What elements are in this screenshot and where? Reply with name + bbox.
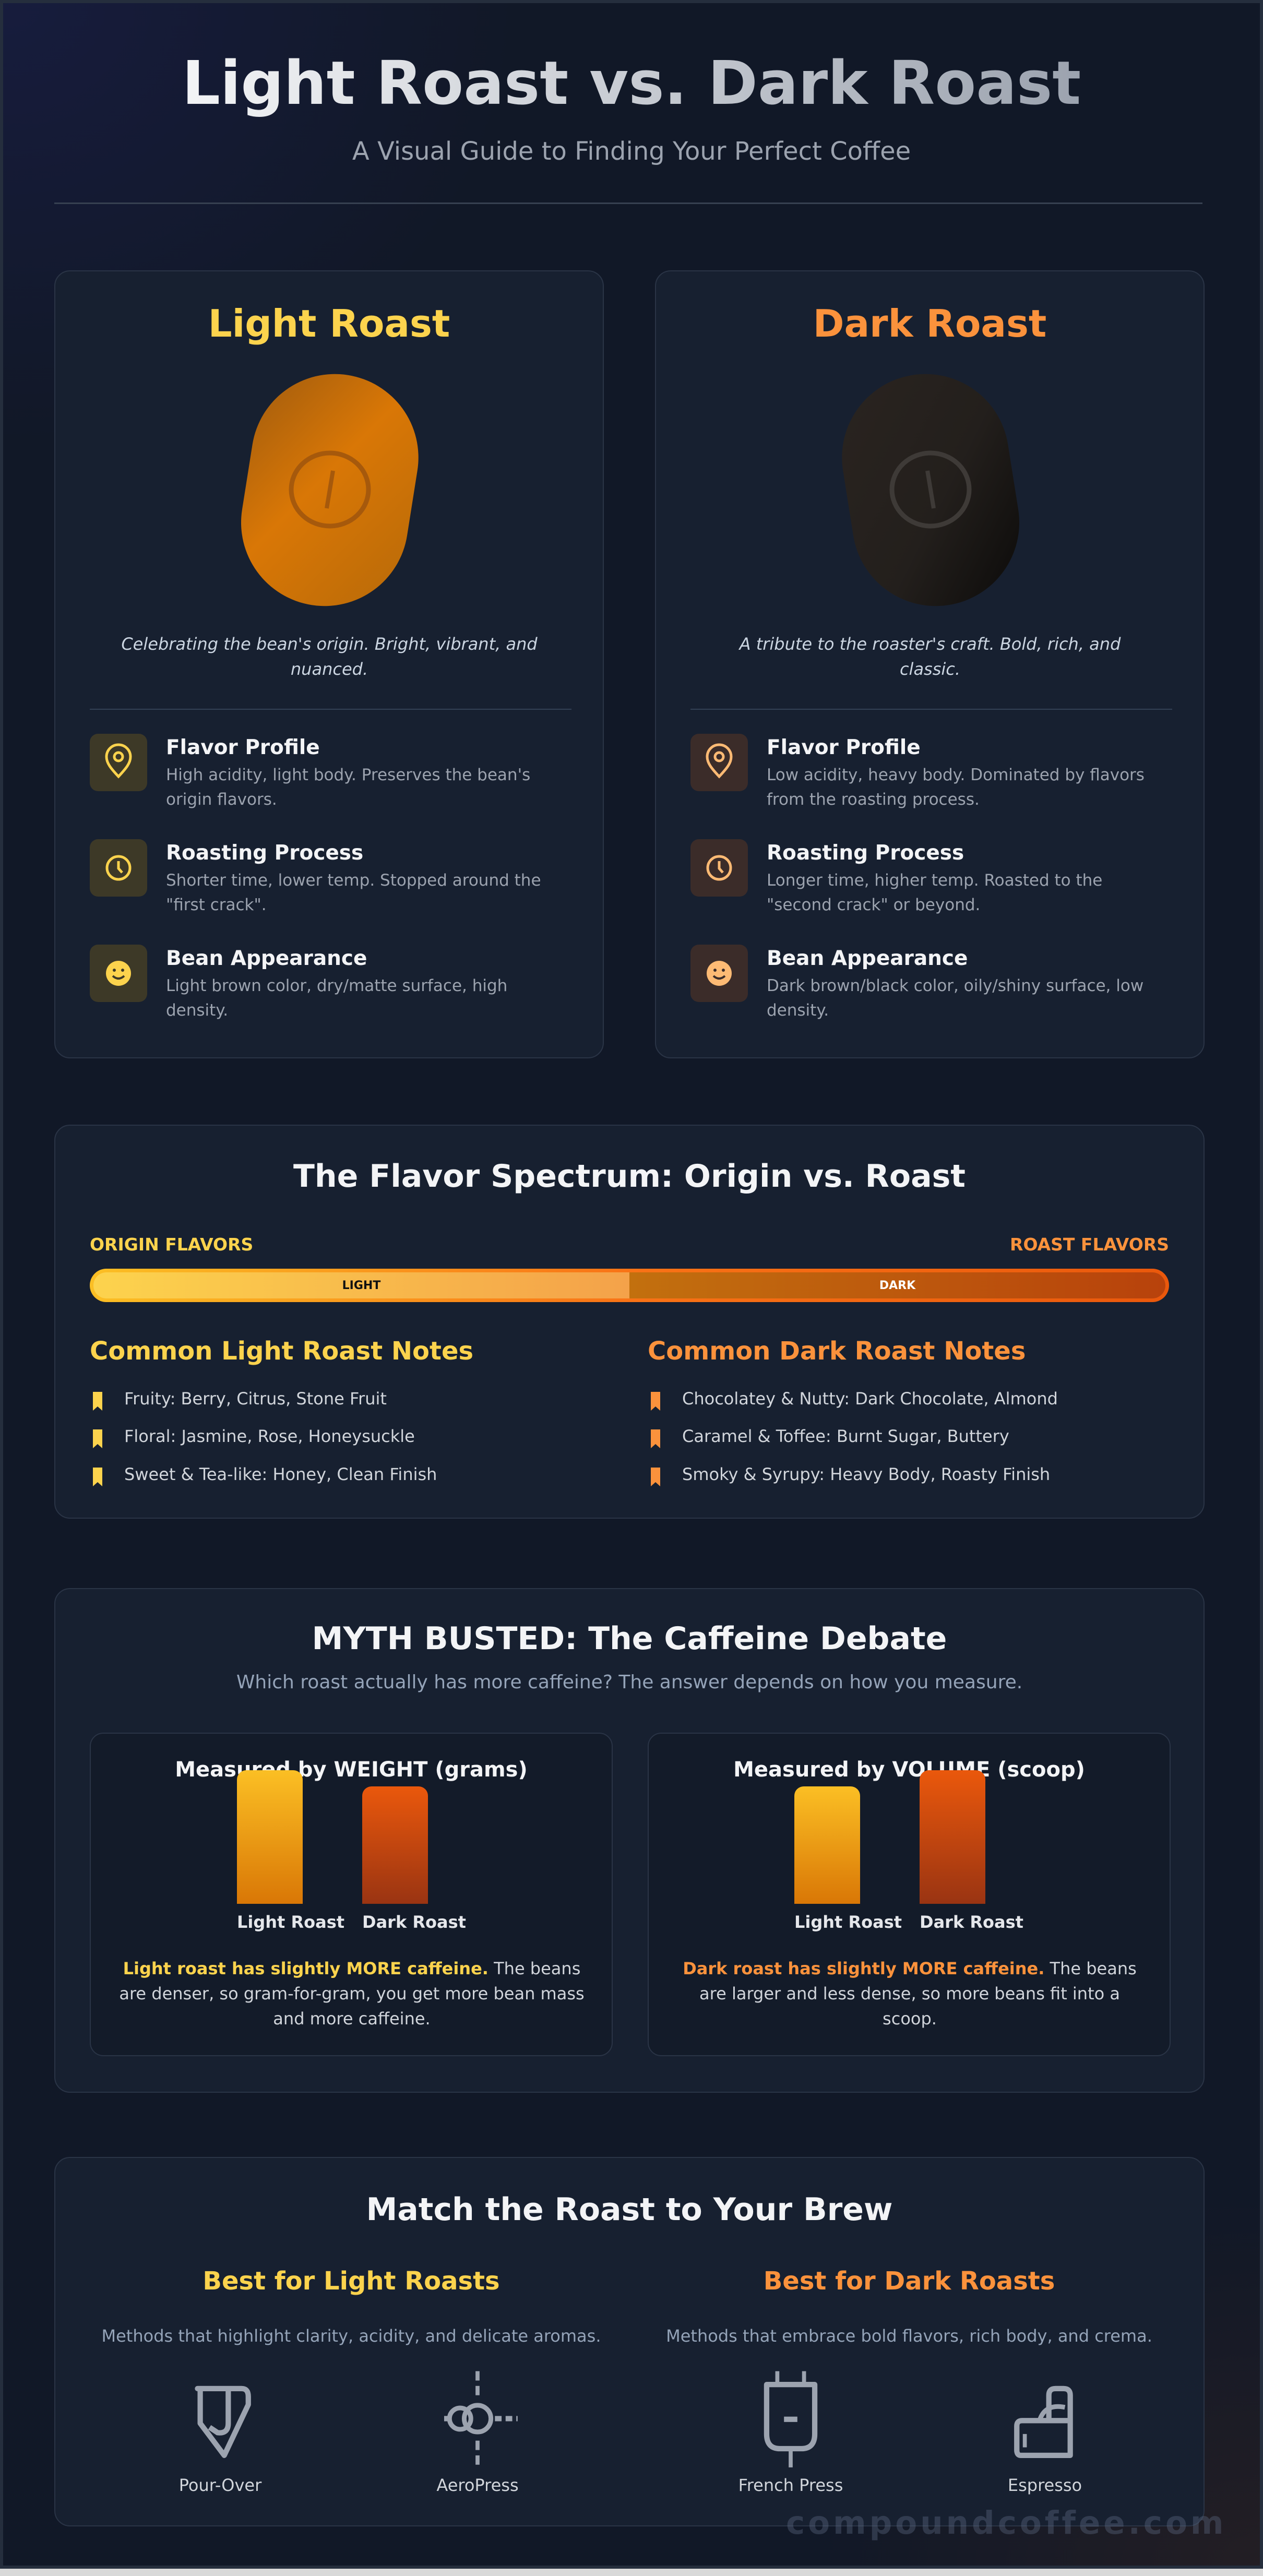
heading: The Flavor Spectrum: Origin vs. Roast	[293, 1158, 966, 1195]
box: by volume	[648, 1733, 1171, 2056]
feature: bean appearance: Light brown color, dry/matte surface, high density.	[166, 976, 507, 1020]
icon: smile	[90, 945, 147, 1002]
feature: roasting process	[690, 839, 1102, 914]
icon: aeropress: AeroPress	[436, 2475, 519, 2495]
icon: clock	[690, 839, 748, 897]
feature: flavor profile: Low acidity, heavy body. Dominated by flavors from the roasting process.	[767, 766, 1145, 809]
feature: roasting process: Roasting Process	[767, 841, 964, 865]
feature: flavor profile: High acidity, light body. Preserves the bean's origin flavors.	[166, 766, 530, 809]
explanation: Dark roast has slightly MORE caffeine. The beans are larger and less dense, so more beans fit into a scoop.	[683, 1959, 1137, 2029]
icon: french press	[738, 2371, 843, 2495]
feature: bean appearance: Bean Appearance	[767, 947, 968, 970]
feature: bean appearance	[690, 945, 1143, 1020]
bar chart	[237, 1770, 466, 1932]
list: dark notes	[651, 1389, 1058, 1486]
heading: dark roast: Dark Roast	[813, 302, 1046, 345]
box: by weight	[90, 1733, 613, 2056]
icon: light bean	[241, 374, 419, 606]
text: light methods: Methods that highlight clarity, acidity, and delicate aromas.	[101, 2326, 601, 2346]
bar chart: Light Roast	[794, 1912, 902, 1932]
label: roast flavors: ROAST FLAVORS	[1010, 1234, 1169, 1255]
feature: flavor profile	[90, 734, 530, 809]
list: dark notes: Caramel & Toffee: Burnt Sugar, Buttery	[682, 1426, 1009, 1446]
feature: bean appearance: Bean Appearance	[166, 947, 367, 970]
icon: aeropress	[436, 2371, 519, 2495]
spectrum bar: LIGHT	[342, 1279, 380, 1292]
list: light notes: Sweet & Tea-like: Honey, Clean Finish	[124, 1464, 437, 1484]
list: dark notes: Smoky & Syrupy: Heavy Body, Roasty Finish	[682, 1464, 1050, 1484]
list: light notes	[93, 1389, 437, 1486]
subheading: dark: Best for Dark Roasts	[764, 2267, 1055, 2296]
feature: roasting process: Roasting Process	[166, 841, 363, 865]
title: Light Roast vs. Dark Roast	[182, 49, 1081, 118]
subtitle: A Visual Guide to Finding Your Perfect Coffee	[352, 137, 911, 166]
heading: dark notes: Common Dark Roast Notes	[648, 1337, 1026, 1366]
box title: Measured by WEIGHT (grams)	[175, 1758, 528, 1782]
feature: bean appearance: Dark brown/black color, oily/shiny surface, low density.	[767, 976, 1143, 1020]
description: A tribute to the roaster's craft. Bold, rich, and classic.	[740, 634, 1121, 679]
panel: match brew	[54, 2157, 1205, 2526]
list: light notes: Fruity: Berry, Citrus, Stone Fruit	[124, 1389, 387, 1409]
heading: light notes: Common Light Roast Notes	[90, 1337, 473, 1366]
icon: pin	[90, 734, 147, 791]
icon: espresso	[1008, 2386, 1082, 2495]
heading: light roast: Light Roast	[208, 302, 450, 345]
watermark: compoundcoffee.com	[786, 2505, 1226, 2542]
icon: french press: French Press	[738, 2475, 843, 2495]
list: light notes: Floral: Jasmine, Rose, Honeysuckle	[124, 1426, 415, 1446]
explanation: Light roast has slightly MORE caffeine. The beans are denser, so gram-for-gram, you get more bean mass and more caffeine.	[119, 1959, 585, 2029]
bar chart	[794, 1770, 1023, 1932]
panel: light roast	[54, 270, 604, 1058]
heading: MYTH BUSTED: The Caffeine Debate	[312, 1620, 947, 1657]
spectrum bar	[90, 1269, 1169, 1302]
bar chart: Dark Roast	[362, 1912, 466, 1932]
icon: clock	[90, 839, 147, 897]
subheading: light: Best for Light Roasts	[202, 2267, 500, 2296]
feature: bean appearance	[90, 945, 507, 1020]
description: Celebrating the bean's origin. Bright, vibrant, and nuanced.	[121, 634, 538, 679]
text: dark methods: Methods that embrace bold flavors, rich body, and crema.	[666, 2326, 1152, 2346]
feature: roasting process	[90, 839, 541, 914]
bar chart: Light Roast	[237, 1912, 344, 1932]
label: origin flavors: ORIGIN FLAVORS	[90, 1234, 253, 1255]
subtitle: Which roast actually has more caffeine? The answer depends on how you measure.	[236, 1672, 1022, 1693]
feature: flavor profile	[690, 734, 1145, 809]
feature: roasting process: Shorter time, lower temp. Stopped around the "first crack".	[166, 871, 541, 914]
icon: espresso: Espresso	[1008, 2475, 1082, 2495]
feature: flavor profile: Flavor Profile	[767, 736, 921, 759]
heading: Match the Roast to Your Brew	[366, 2191, 892, 2228]
panel: flavor spectrum	[54, 1125, 1205, 1519]
icon: pour-over: Pour-Over	[179, 2475, 261, 2495]
feature: flavor profile: Flavor Profile	[166, 736, 320, 759]
panel: caffeine debate	[54, 1588, 1205, 2093]
icon: smile	[690, 945, 748, 1002]
icon: pour-over	[179, 2386, 262, 2495]
panel: dark roast	[655, 270, 1205, 1058]
list: dark notes: Chocolatey & Nutty: Dark Chocolate, Almond	[682, 1389, 1058, 1409]
bar chart: Dark Roast	[920, 1912, 1023, 1932]
feature: roasting process: Longer time, higher temp. Roasted to the "second crack" or beyond.	[767, 871, 1102, 914]
box title: Measured by VOLUME (scoop)	[733, 1758, 1085, 1782]
spectrum bar: DARK	[879, 1279, 915, 1292]
icon: dark bean	[842, 374, 1019, 606]
icon: pin	[690, 734, 748, 791]
